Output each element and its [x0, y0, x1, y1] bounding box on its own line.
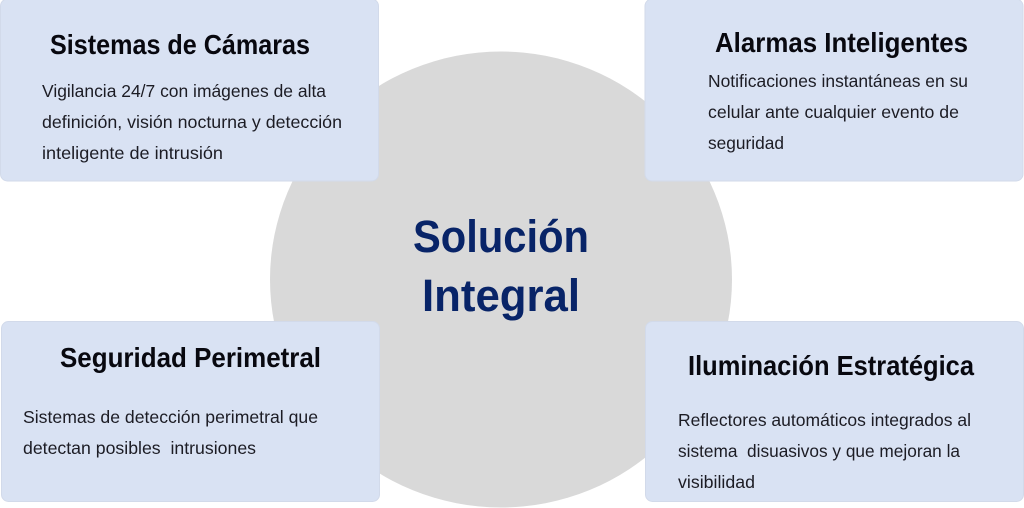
text block: lighting description: visibilidad: [678, 472, 755, 492]
heading: Alarmas Inteligentes: Alarmas Inteligentes: [715, 27, 968, 58]
center title: Solución Integral: Solución: [413, 211, 589, 262]
text block: alarms description: Notificaciones instantáneas en su: [708, 71, 968, 91]
heading: Sistemas de Cámaras: Sistemas de Cámaras: [50, 29, 310, 60]
panel: Alarmas Inteligentes: [645, 0, 1023, 181]
text block: cameras description: inteligente de intrusión: [42, 143, 223, 163]
heading: Seguridad Perimetral: Seguridad Perimetral: [60, 342, 321, 373]
text block: alarms description: seguridad: [708, 133, 784, 153]
text block: cameras description: definición, visión nocturna y detección: [42, 112, 342, 132]
text block: lighting description: sistema disuasivos y que mejoran la: [678, 441, 960, 461]
center title: Solución Integral: [413, 211, 589, 321]
center circle: [270, 52, 732, 508]
text block: alarms description: celular ante cualquier evento de: [708, 102, 959, 122]
text block: perimeter description: detectan posibles intrusiones: [23, 438, 256, 458]
panel: Iluminación Estratégica: [646, 322, 1024, 502]
text block: alarms description: [708, 71, 968, 153]
text block: perimeter description: [23, 407, 318, 458]
heading: Iluminación Estratégica: Iluminación Estratégica: [688, 350, 974, 381]
panel: Sistemas de Cámaras: [0, 0, 378, 181]
text block: lighting description: Reflectores automáticos integrados al: [678, 410, 971, 430]
panel: Seguridad Perimetral: [2, 322, 380, 502]
text block: cameras description: Vigilancia 24/7 con imágenes de alta: [42, 81, 326, 101]
center title: Solución Integral: Integral: [422, 270, 580, 321]
text block: lighting description: [678, 410, 971, 492]
text block: perimeter description: Sistemas de detección perimetral que: [23, 407, 318, 427]
text block: cameras description: [42, 81, 342, 163]
